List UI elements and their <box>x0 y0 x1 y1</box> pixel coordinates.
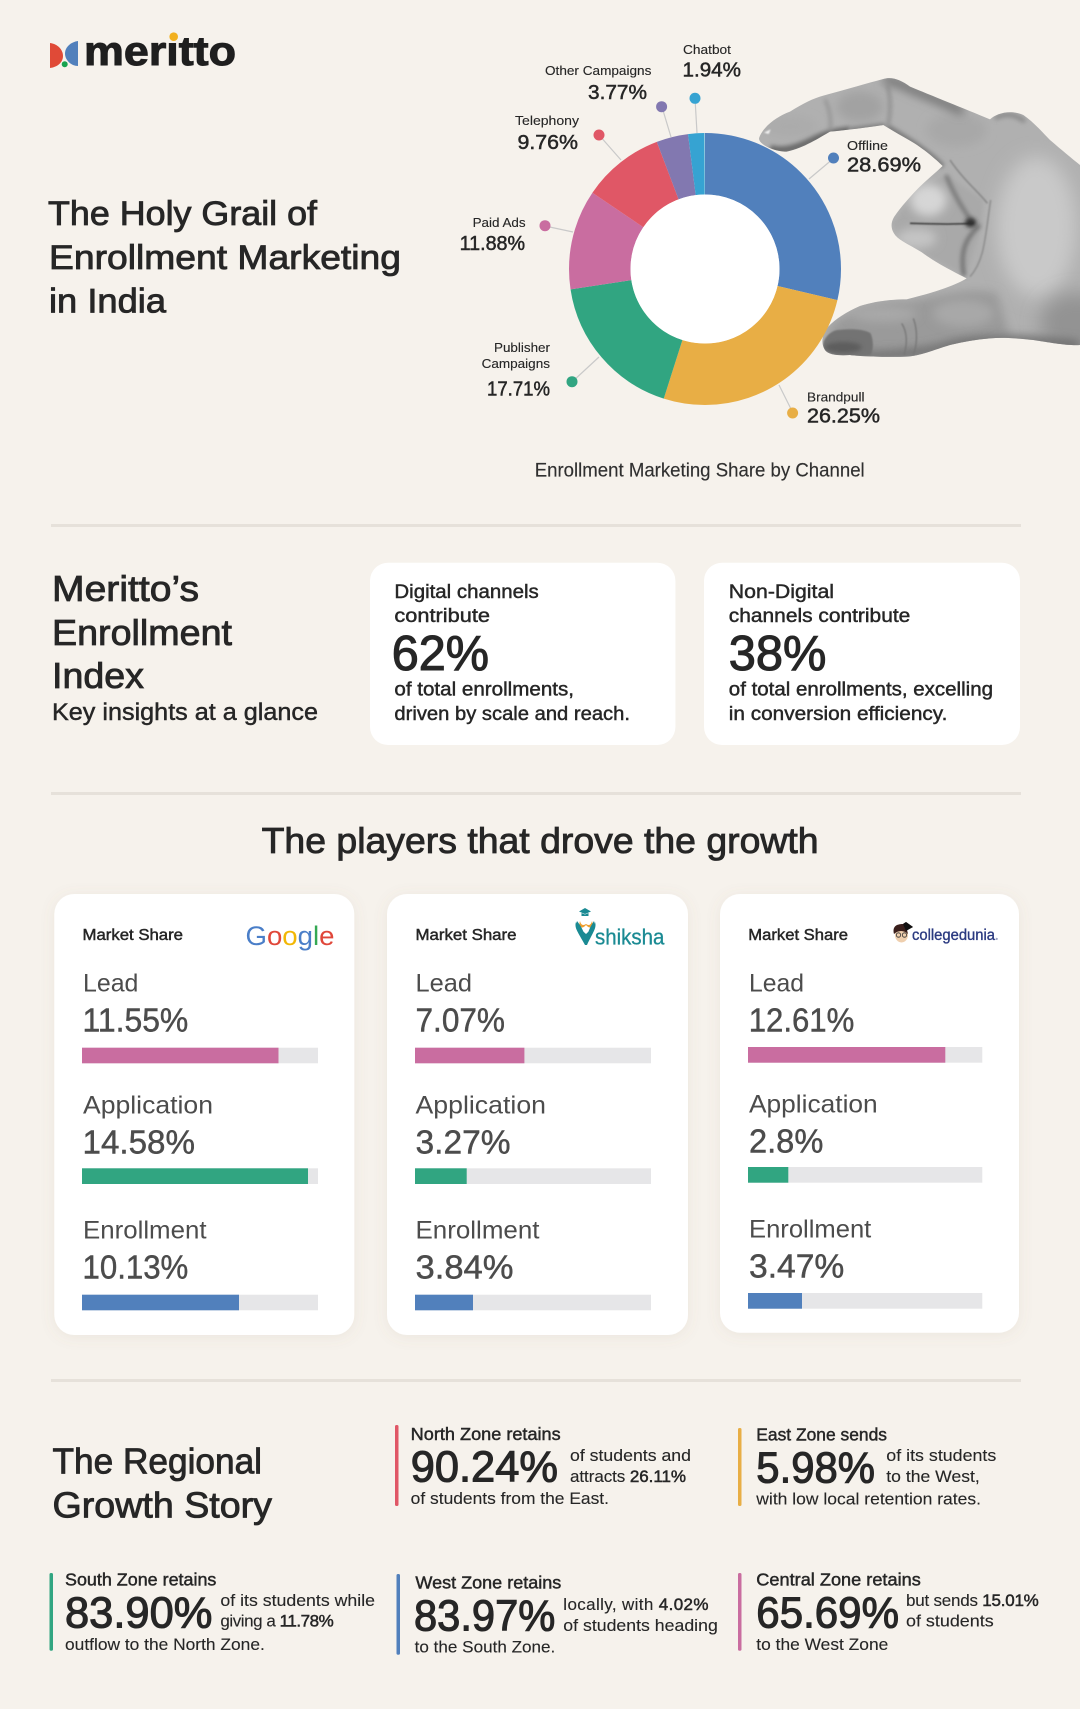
heading: regional growth <box>52 1440 272 1526</box>
metric: enrollment: Enrollment <box>749 1216 871 1244</box>
metric: application: Application <box>416 1091 546 1119</box>
panel: Collegedunia market share <box>720 894 1019 1333</box>
chart labels: Telephony <box>515 113 580 128</box>
panel: non-digital channels: Non-Digital <box>729 581 834 603</box>
metric: application <box>82 1091 318 1184</box>
chart labels: Campaigns <box>482 356 551 371</box>
metric: lead: 7.07% <box>416 1002 505 1039</box>
heading: players: The players that drove the growth <box>262 820 819 861</box>
stat: West Zone <box>396 1573 718 1657</box>
panel: digital channels: contribute <box>394 605 490 627</box>
metric: application <box>748 1090 982 1183</box>
metric: enrollment: Enrollment <box>416 1216 540 1244</box>
chart labels: 1.94% <box>682 60 741 82</box>
heading: regional growth: Growth Story <box>52 1484 272 1526</box>
heading: Meritto's Enrollment Index <box>52 568 318 726</box>
chart labels: 17.71% <box>487 379 550 401</box>
chart labels: Other Campaigns <box>545 63 652 78</box>
chart labels: 26.25% <box>807 406 880 428</box>
title: The Holy Grail of <box>48 195 317 233</box>
stat: Central Zone: Central Zone retains <box>756 1570 921 1590</box>
stat: East Zone <box>738 1425 996 1509</box>
metric: enrollment: 3.84% <box>416 1248 514 1285</box>
panel: Google market share <box>54 894 354 1335</box>
panel: digital channels <box>370 563 675 745</box>
stat: East Zone: 5.98% <box>756 1444 875 1493</box>
stat: North Zone: of students and <box>570 1446 691 1465</box>
stat: South Zone <box>50 1570 375 1654</box>
metric: enrollment <box>748 1216 982 1309</box>
panel: digital channels: Digital channels <box>394 581 539 603</box>
chart labels: Offline <box>847 138 888 153</box>
stat: East Zone: of its students <box>886 1446 996 1465</box>
title: Enrollment Marketing <box>49 239 401 277</box>
panel: Collegedunia market share: Market Share <box>748 927 848 944</box>
chart labels: Publisher <box>494 340 551 355</box>
stat: North Zone: of students from the East. <box>411 1489 609 1508</box>
stat: North Zone <box>395 1424 691 1508</box>
metric: enrollment: 3.47% <box>749 1248 844 1285</box>
title: in India <box>49 282 167 320</box>
metric: application: Application <box>83 1091 213 1119</box>
stat: West Zone: 83.97% <box>414 1592 555 1641</box>
chart: enrollment marketing share donut <box>540 93 839 419</box>
metric: lead: Lead <box>416 970 472 998</box>
logo: Shiksha <box>575 908 665 949</box>
metric: lead: Lead <box>83 970 138 998</box>
heading: Meritto's Enrollment Index: Key insights at a glance <box>52 699 318 726</box>
heading: regional growth: The Regional <box>52 1440 262 1482</box>
metric: lead: 12.61% <box>749 1002 854 1039</box>
stat: South Zone: outflow to the North Zone. <box>65 1635 265 1654</box>
panel: Shiksha market share <box>387 894 688 1335</box>
stat: West Zone: locally, with 4.02% <box>563 1595 708 1614</box>
logo: Collegedunia: collegedunia <box>912 927 995 944</box>
heading: Meritto's Enrollment Index: Index <box>52 655 144 696</box>
chart labels: 3.77% <box>588 82 647 104</box>
chart caption: Enrollment Marketing Share by Channel <box>535 460 865 482</box>
metric: lead: Lead <box>749 970 804 998</box>
metric: enrollment: 10.13% <box>82 1248 188 1285</box>
panel: non-digital channels: channels contribute <box>729 605 910 627</box>
metric: lead: 11.55% <box>82 1002 188 1039</box>
panel: non-digital channels <box>704 563 1020 745</box>
heading: Meritto's Enrollment Index: Meritto’s <box>52 568 199 609</box>
stat: Central Zone: to the West Zone <box>756 1635 888 1654</box>
panel: digital channels: 62% <box>392 627 489 681</box>
stat: South Zone: South Zone retains <box>65 1570 217 1590</box>
metric: application <box>415 1091 651 1184</box>
stat: Central Zone: of students <box>906 1612 994 1631</box>
stat: West Zone: of students heading <box>563 1616 718 1635</box>
icon: hand photo <box>759 78 1080 357</box>
stat: North Zone: North Zone retains <box>411 1424 561 1444</box>
panel: Shiksha market share: Market Share <box>416 927 516 944</box>
heading: Meritto's Enrollment Index: Enrollment <box>52 612 232 653</box>
panel: digital channels: driven by scale and reach. <box>394 703 630 725</box>
metric: enrollment: Enrollment <box>83 1216 207 1244</box>
donut segments <box>600 164 810 374</box>
chart labels: 28.69% <box>847 155 921 177</box>
panel: non-digital channels: of total enrollments, excelling <box>729 679 993 701</box>
stat: East Zone: with low local retention rates. <box>755 1490 981 1509</box>
logo: meritto: meritto <box>84 28 236 74</box>
stat: North Zone: 90.24% <box>411 1443 558 1492</box>
metric: application: 3.27% <box>416 1123 510 1160</box>
stat: South Zone: of its students while <box>220 1591 375 1610</box>
panel: non-digital channels: 38% <box>729 627 826 681</box>
chart labels: 9.76% <box>518 132 578 154</box>
title <box>48 195 401 320</box>
metric: enrollment <box>82 1216 318 1310</box>
stat: Central Zone: 65.69% <box>756 1589 899 1638</box>
stat: West Zone: West Zone retains <box>415 1573 562 1593</box>
leader lines <box>545 98 834 413</box>
metric: lead <box>82 970 318 1063</box>
stat: North Zone: attracts 26.11% <box>570 1467 686 1486</box>
chart labels: 11.88% <box>460 233 525 255</box>
stat: East Zone: to the West, <box>886 1467 980 1486</box>
marker dots <box>540 93 839 419</box>
chart labels: Brandpull <box>807 390 865 405</box>
metric: enrollment <box>415 1216 651 1310</box>
metric: application: 2.8% <box>749 1123 823 1160</box>
stat: South Zone: 83.90% <box>65 1589 212 1638</box>
panel: Google market share: Market Share <box>82 927 183 944</box>
chart labels: Chatbot <box>683 42 731 57</box>
panel: digital channels: of total enrollments, <box>394 679 574 701</box>
stat: West Zone: to the South Zone. <box>415 1638 555 1657</box>
chart labels <box>460 42 921 428</box>
logo: Collegedunia: .in <box>995 936 998 941</box>
metric: application: Application <box>749 1090 878 1118</box>
logo: Shiksha: shiksha <box>595 924 665 949</box>
metric: lead <box>748 970 982 1063</box>
metric: lead <box>415 970 651 1063</box>
stat: East Zone: East Zone sends <box>756 1425 887 1445</box>
stat: Central Zone: but sends 15.01% <box>906 1591 1039 1610</box>
metric: application: 14.58% <box>82 1123 195 1160</box>
panel: non-digital channels: in conversion efficiency. <box>729 703 947 725</box>
chart labels: Paid Ads <box>473 215 526 230</box>
logo: Google: Google <box>246 921 334 951</box>
stat: Central Zone <box>738 1570 1039 1654</box>
stat: South Zone: giving a 11.78% <box>220 1612 334 1631</box>
logo: Collegedunia <box>894 922 998 944</box>
